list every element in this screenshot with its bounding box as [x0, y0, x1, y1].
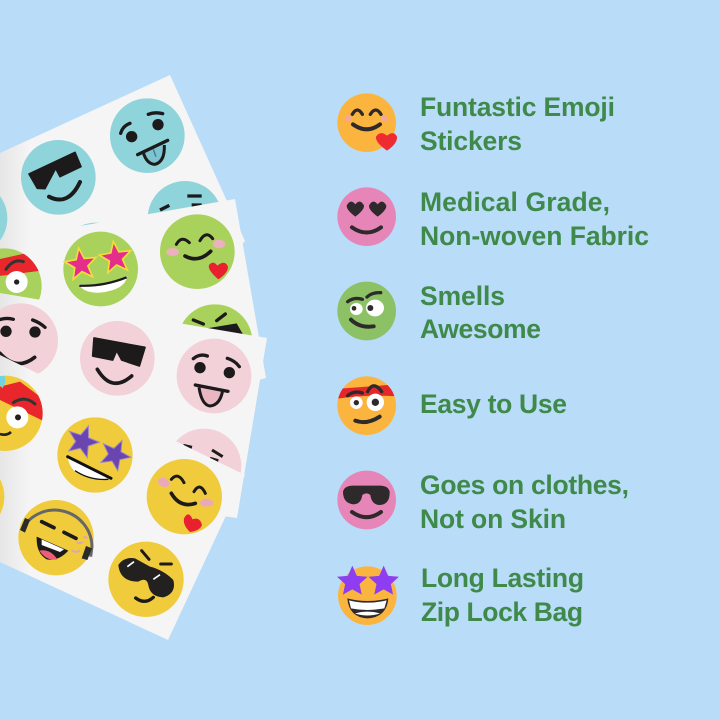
text: Smells Awesome: Awesome — [420, 314, 541, 344]
sticker sheets fan — [0, 75, 267, 640]
icon: face with red headband — [335, 376, 397, 435]
feature row: Funtastic Emoji Stickers — [337, 92, 615, 156]
text: Easy to Use: Easy to Use — [420, 389, 567, 419]
text: Long Lasting Zip Lock Bag — [421, 563, 584, 627]
icon: heart eyes face — [337, 187, 396, 246]
panel: pink sticker sheet — [0, 293, 267, 518]
icon: smiling face with heart — [337, 93, 397, 152]
text: Medical Grade, Non-woven Fabric: Non-woven Fabric — [420, 221, 649, 251]
text: Long Lasting Zip Lock Bag: Zip Lock Bag — [421, 597, 583, 627]
feature row: Goes on clothes — [337, 470, 629, 534]
panel: cyan sticker sheet — [0, 75, 245, 400]
text: Medical Grade, Non-woven Fabric: Medical Grade, — [420, 187, 610, 217]
feature row: Smells Awesome — [337, 281, 541, 344]
text: Funtastic Emoji Stickers: Funtastic Emoji — [420, 92, 615, 122]
icon: pink face with sunglasses — [337, 471, 396, 529]
feature row: Medical Grade — [337, 187, 649, 251]
text: Goes on clothes, Not on Skin: Not on Skin — [420, 504, 566, 534]
icon: green smirking face — [337, 282, 396, 340]
icon: star eyes face — [337, 566, 399, 625]
text: Goes on clothes, Not on Skin: Goes on clothes, — [420, 470, 629, 500]
text: Funtastic Emoji Stickers: Stickers — [420, 126, 522, 156]
text: Smells Awesome — [420, 281, 541, 344]
panel: green sticker sheet — [0, 199, 266, 380]
text: Smells Awesome: Smells — [420, 281, 505, 311]
panel: yellow sticker sheet — [0, 355, 245, 640]
text: Medical Grade, Non-woven Fabric — [420, 187, 649, 251]
text: Goes on clothes, Not on Skin — [420, 470, 629, 534]
feature row: Long Lasting Zip Lock Bag — [337, 563, 584, 627]
feature row: Easy to Use — [335, 376, 567, 435]
text: Funtastic Emoji Stickers — [420, 92, 615, 156]
text: Long Lasting Zip Lock Bag: Long Lasting — [421, 563, 584, 593]
